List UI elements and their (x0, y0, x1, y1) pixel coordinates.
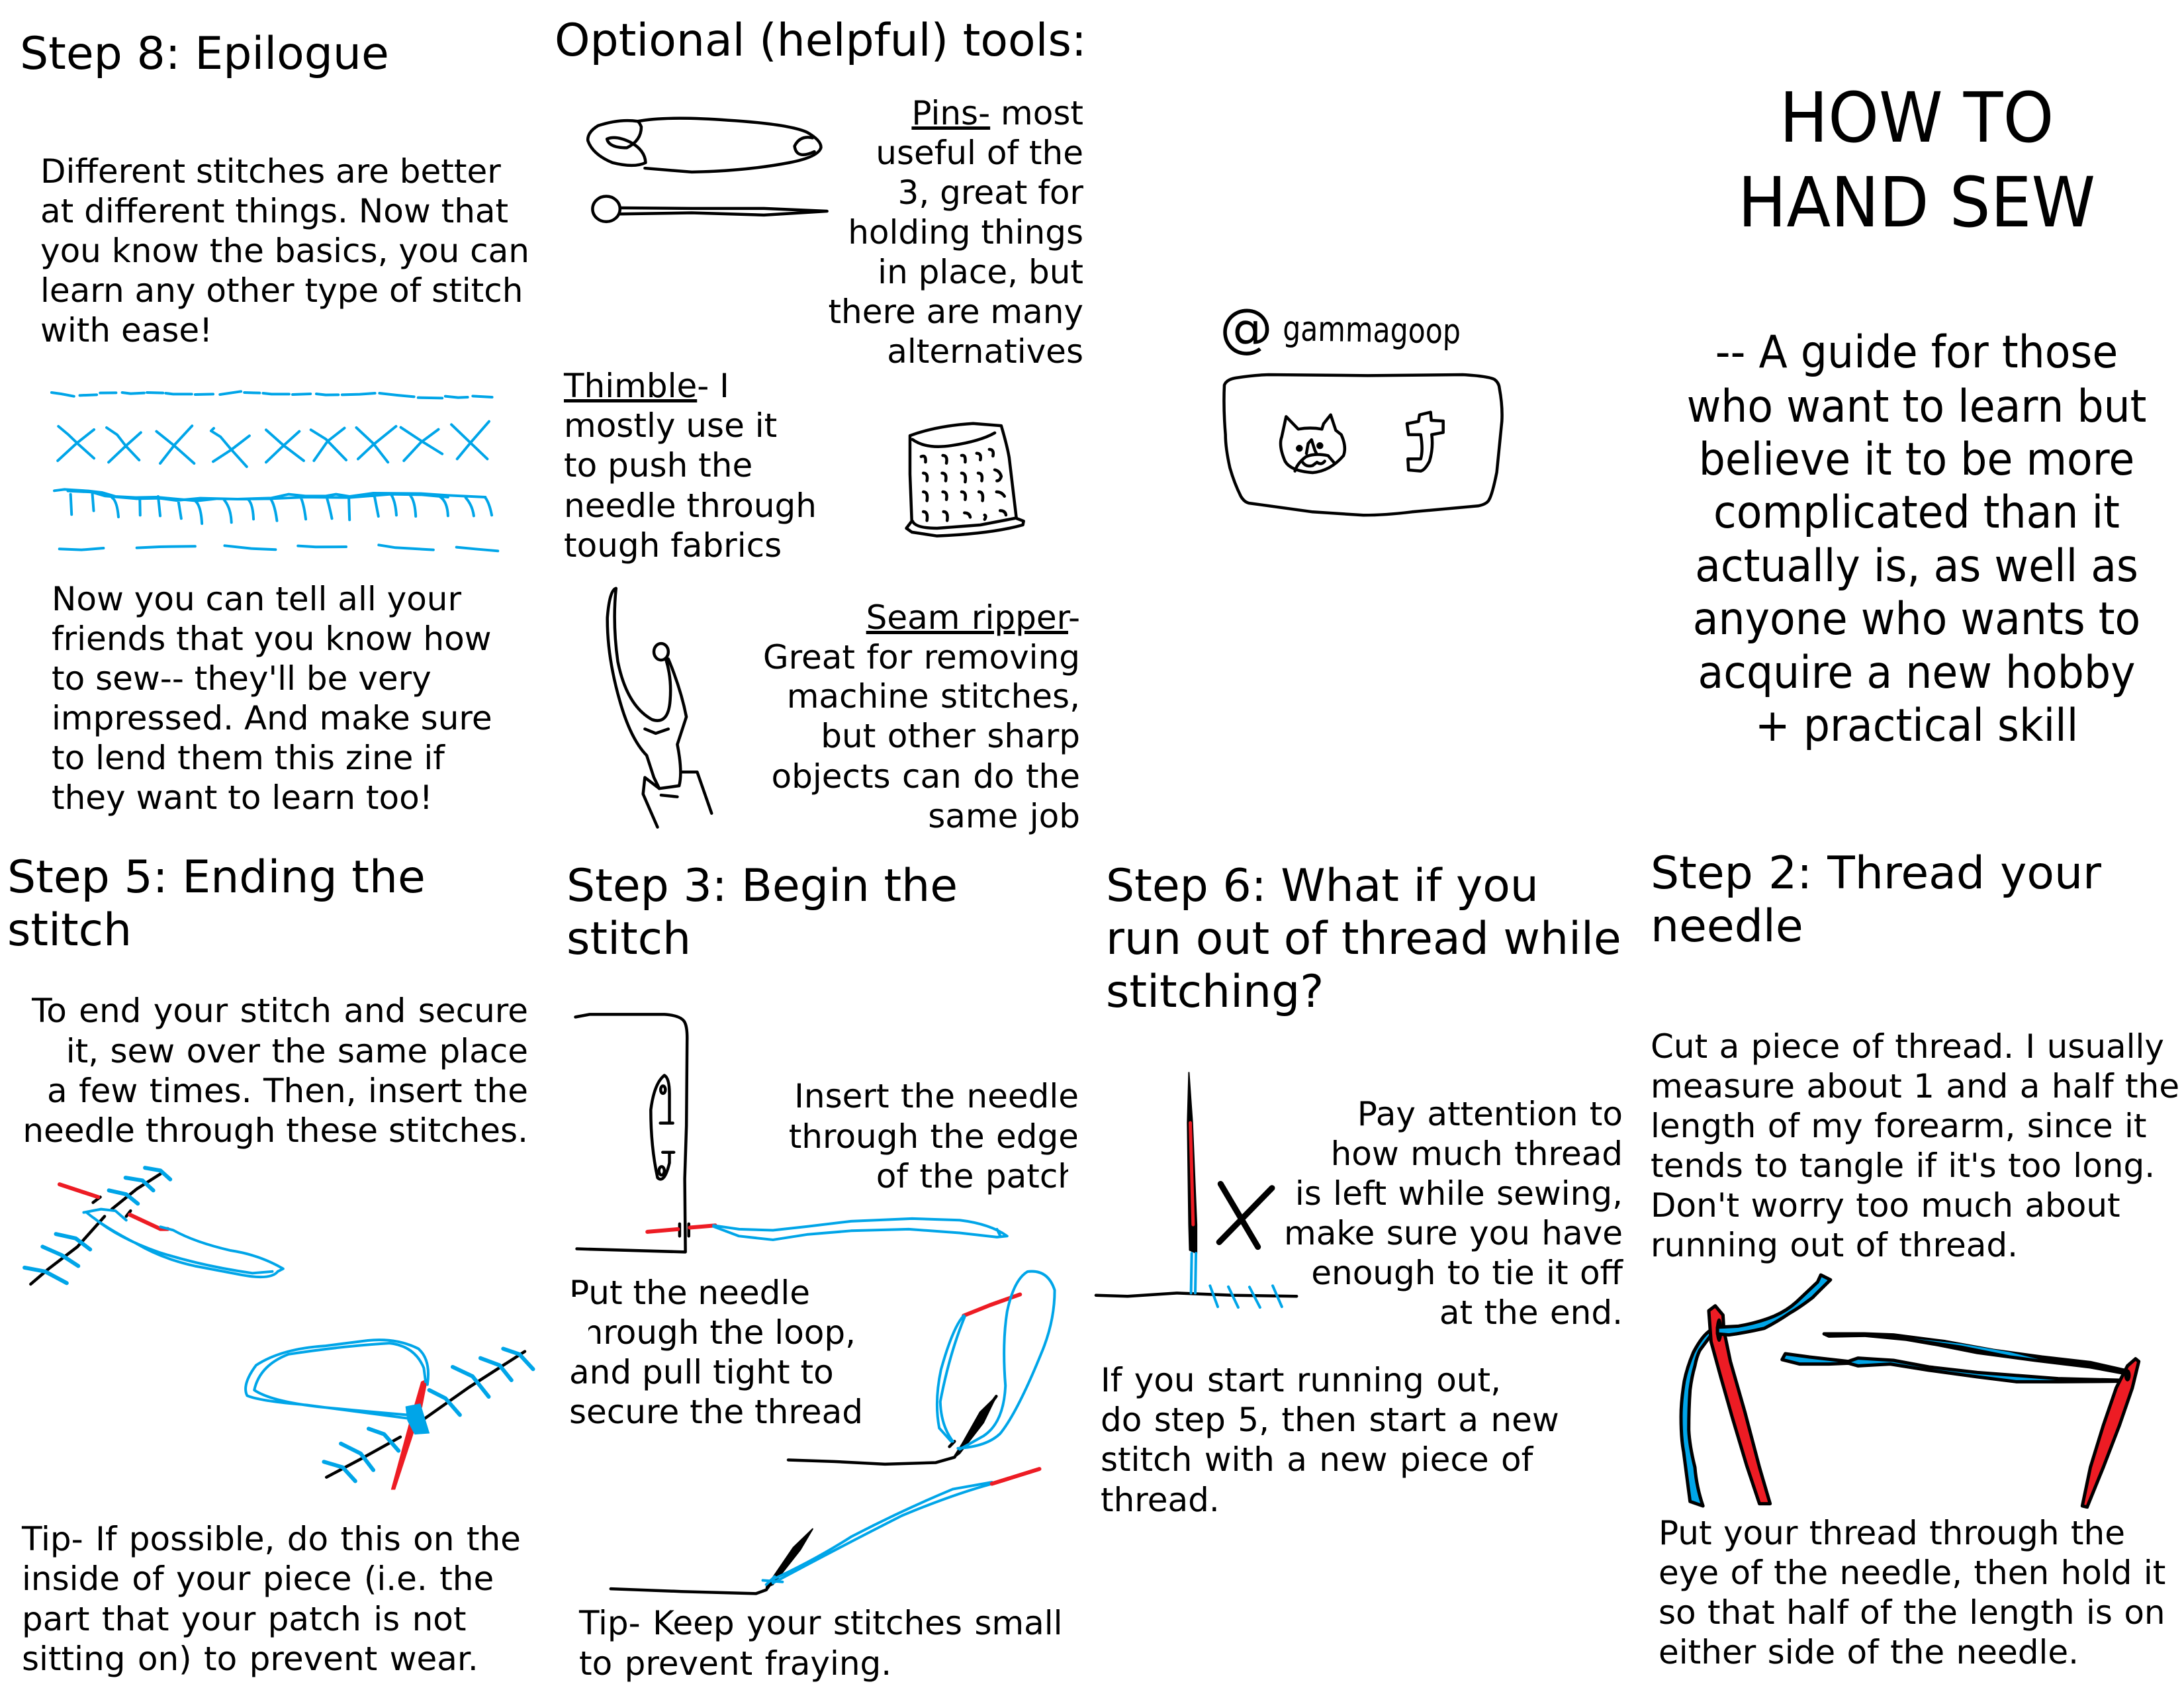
text: pins: there are many (828, 293, 1083, 331)
panel: step 3 begin the stitch (566, 860, 1090, 1683)
text: tip inside of piece: part that your patch is not (22, 1600, 466, 1638)
heading: step 2: Step 2: Thread your (1651, 847, 2101, 900)
text: put your thread: eye of the needle, then hold it (1659, 1554, 2165, 1592)
text: pay attention: Pay attention to (1357, 1095, 1623, 1133)
text: tell your friends: they want to learn too! (52, 778, 433, 817)
text: cut thread: tends to tangle if it's too long. (1651, 1147, 2155, 1185)
text: end your stitch: it, sew over the same place (66, 1032, 528, 1070)
illustration: tightened thread (611, 1469, 1039, 1593)
title: HAND SEW (1738, 162, 2095, 243)
panel: optional tools (555, 15, 1087, 835)
heading: step 6: stitching? (1106, 966, 1324, 1018)
heading: step 5: Step 5: Ending the (7, 851, 426, 904)
panel: step 8 epilogue (20, 28, 529, 817)
text: seam ripper: Seam ripper- (866, 598, 1080, 637)
text: tip inside of piece: Tip- If possible, do this on the (21, 1520, 521, 1558)
text: seam ripper: same job (928, 797, 1080, 835)
text: put your thread: Put your thread through the (1659, 1514, 2125, 1552)
text: pay attention: is left while sewing, (1295, 1174, 1623, 1213)
blanket stitch (54, 489, 492, 524)
handwritten handle (1220, 297, 1461, 359)
text: pay attention: at the end. (1439, 1293, 1623, 1332)
text: tip inside of piece: sitting on) to prevent wear. (22, 1640, 478, 1678)
text: if you start running out: do step 5, then start a new (1101, 1401, 1559, 1439)
handwritten handle: gammagoop (1283, 309, 1461, 352)
text: end your stitch: a few times. Then, insert the (47, 1072, 528, 1110)
text: insert the needle: of the patch (876, 1157, 1079, 1196)
running stitch (52, 391, 492, 398)
text: tell your friends: Now you can tell all your (52, 580, 461, 618)
text: seam ripper: objects can do the (771, 757, 1080, 796)
handwritten handle: @ (1220, 297, 1273, 359)
heading: step 3: stitch (567, 913, 691, 965)
panel: step 2 thread your needle (1651, 847, 2179, 1671)
icon: seam ripper (608, 588, 711, 827)
text: tell your friends: to sew-- they'll be very (52, 659, 432, 698)
text: put the needle: through the loop, (569, 1313, 856, 1352)
text: pins: Pins- most (911, 94, 1083, 132)
text: thimble: needle through (564, 487, 817, 525)
text: cut thread: length of my forearm, since it (1651, 1107, 2147, 1145)
panel: title (1687, 77, 2146, 752)
text: put the needle: secure the thread (569, 1393, 863, 1431)
icon: safety pin and pin (588, 118, 827, 222)
text: seam ripper: but other sharp (821, 717, 1080, 755)
panel: step 5 ending the stitch (7, 851, 533, 1678)
title: HOW TO (1780, 77, 2054, 158)
subtitle: -- A guide for those (1715, 326, 2118, 379)
text: cut thread: Don't worry too much about (1651, 1186, 2120, 1225)
subtitle: anyone who wants to (1693, 593, 2140, 645)
panel: social handles (1220, 297, 1502, 515)
text: pins: 3, great for (898, 173, 1083, 212)
icon: thimble (907, 424, 1024, 536)
text: tip inside of piece: inside of your piece (i.e. the (22, 1560, 494, 1598)
subtitle: + practical skill (1755, 700, 2078, 752)
text: if you start running out: If you start running out, (1101, 1361, 1501, 1399)
illustration: short thread with X (1096, 1072, 1297, 1307)
text: put your thread: so that half of the length is on (1659, 1593, 2165, 1632)
icons: rounded box with cat and tumblr (1224, 375, 1502, 515)
text: cut thread: measure about 1 and a half the (1651, 1067, 2179, 1105)
text: insert the needle: Insert the needle (794, 1077, 1079, 1115)
long running stitch (60, 545, 498, 551)
text: tell your friends: to lend them this zine if (52, 739, 445, 777)
panel: step 6 running out of thread (1096, 860, 1624, 1519)
text: pay attention: how much thread (1331, 1135, 1623, 1173)
text: pins: alternatives (887, 332, 1083, 371)
text: tell your friends: impressed. And make sure (52, 699, 492, 737)
text: thimble: mostly use it (564, 406, 777, 445)
illustration: four blue stitch types (52, 391, 498, 551)
text: pins: holding things (848, 213, 1083, 252)
text: pins: in place, but (878, 253, 1083, 291)
subtitle: who want to learn but (1687, 381, 2146, 433)
text: different stitches: Different stitches are better (40, 152, 501, 191)
subtitle: complicated than it (1713, 487, 2120, 539)
text: if you start running out: thread. (1101, 1481, 1220, 1519)
illustration: needle through stitches (24, 1168, 283, 1284)
text: put the needle: and pull tight to (569, 1353, 834, 1391)
text: cut thread: running out of thread. (1651, 1226, 2018, 1264)
heading: step 2: needle (1651, 900, 1803, 953)
text: seam ripper: machine stitches, (787, 677, 1080, 716)
text: different stitches: you know the basics, you can (40, 232, 529, 270)
text: thimble: Thimble- I (564, 367, 729, 405)
illustration: pull loop tight (246, 1340, 533, 1489)
text: end your stitch: To end your stitch and secure (31, 992, 528, 1030)
text: different stitches: learn any other type of stitch (40, 271, 523, 310)
illustration: threaded needles (1681, 1275, 2139, 1507)
text: if you start running out: stitch with a new piece of (1101, 1440, 1534, 1479)
text: thimble: tough fabrics (564, 526, 782, 565)
text: different stitches: at different things. Now that (40, 192, 508, 230)
text: tell your friends: friends that you know how (52, 620, 492, 658)
heading: step 6: Step 6: What if you (1106, 860, 1539, 912)
text: seam ripper: Great for removing (763, 638, 1080, 677)
illustration: patch with safety pin (575, 1014, 1007, 1252)
heading: step 5: stitch (7, 904, 132, 957)
text: pay attention: enough to tie it off (1311, 1254, 1624, 1292)
text: thimble: to push the (564, 446, 752, 485)
subtitle: believe it to be more (1699, 434, 2134, 486)
text: pins: useful of the (876, 134, 1083, 172)
heading: optional tools: Optional (helpful) tools: (555, 15, 1087, 67)
heading: step 6: run out of thread while (1106, 913, 1621, 965)
subtitle: acquire a new hobby (1698, 647, 2136, 699)
heading: step 8: Step 8: Epilogue (20, 28, 389, 80)
text: tip keep stitches small: to prevent fraying. (579, 1644, 891, 1683)
text: put the needle: Put the needle (569, 1274, 810, 1312)
text: end your stitch: needle through these stitches. (23, 1111, 528, 1150)
text: tip keep stitches small: Tip- Keep your stitches small (578, 1604, 1063, 1642)
subtitle: actually is, as well as (1695, 540, 2138, 592)
cross stitch (58, 422, 489, 467)
text: pay attention: make sure you have (1284, 1214, 1623, 1252)
text: put your thread: either side of the needle. (1659, 1633, 2079, 1671)
heading: step 3: Step 3: Begin the (567, 860, 958, 912)
text: insert the needle: through the edge (789, 1117, 1079, 1156)
text: different stitches: with ease! (40, 311, 212, 350)
text: cut thread: Cut a piece of thread. I usually (1651, 1027, 2164, 1066)
illustration: thread loop (788, 1272, 1055, 1464)
